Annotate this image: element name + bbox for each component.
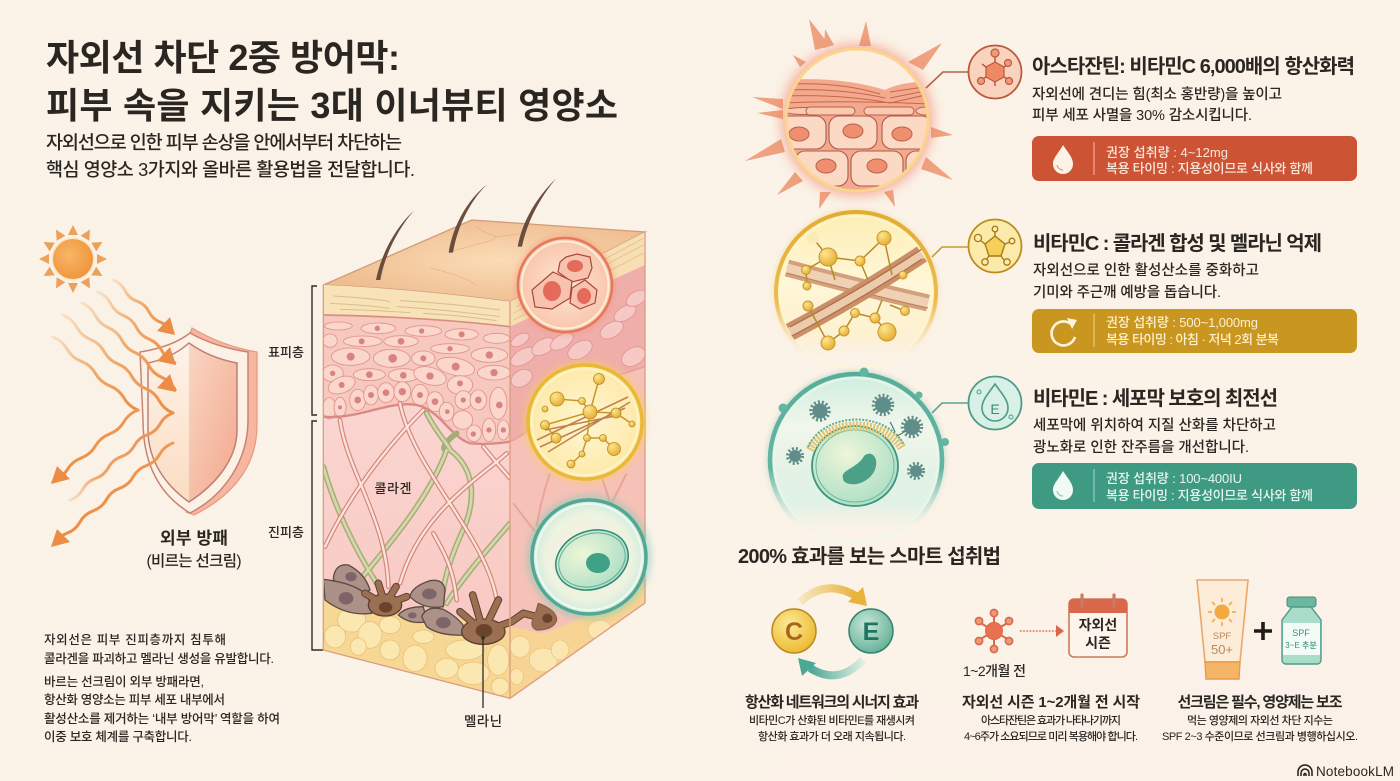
callout: dosage: 복용 타이밍 : 지용성이므로 식사와 함께 [1106,488,1313,503]
illustration: sunburned skin circle [745,19,968,209]
icon: calendar: 시즌 [1085,635,1111,651]
body [1033,417,1276,456]
icon: vitamin E drop: E [990,401,1000,417]
collagen fibres [323,403,510,603]
melanocyte dendritic cells [365,583,557,644]
body: 자외선에 견디는 힘(최소 홍반량)을 높이고 [1032,86,1282,103]
caption: 아스타잔틴은 효과가 나타나기까지 [981,714,1121,727]
icon: sun [39,225,107,293]
icon: vitamin E coin [849,609,893,653]
title [46,37,618,126]
callout: dosage [1032,463,1357,509]
brackets and layer labels: 진피층 [268,525,304,540]
icon: vitamin E coin: E [863,618,879,646]
caption [1162,694,1358,743]
label: external defense: (비르는 선크림) [146,552,242,570]
caption: 항산화 네트워크의 시너지 효과 [745,694,919,711]
caption: 비타민C가 산화된 비타민E를 재생시켜 [749,714,915,727]
icon: supplement bottle: SPF [1292,628,1310,638]
label: melanin with leader: 멜라닌 [464,714,502,729]
text block: explanation: 항산화 영양소는 피부 세포 내부에서 [44,693,225,707]
caption [962,694,1140,743]
icon: sunscreen tube: 50+ [1211,642,1233,657]
label: 1~2개월 전 [963,663,1026,679]
icon: vitamin C molecule [968,220,1022,272]
label: external defense: 외부 방패 [160,529,228,548]
caption: 항산화 효과가 더 오래 지속됩니다. [758,730,906,743]
stratum corneum [323,285,510,327]
text block: explanation: 활성산소를 제거하는 ‘내부 방어막’ 역할을 하여 [44,711,280,726]
callout: dosage: 권장 섭취량 : 500~1,000mg [1106,315,1258,330]
hair [376,179,556,280]
callout: dosage [1032,309,1357,353]
text block: explanation: 자외선은 피부 진피층까지 침투해 [44,633,226,647]
panel: vitamin C [774,210,1357,374]
epidermis [323,313,510,444]
body: 기미와 주근깨 예방을 돕습니다. [1033,284,1221,301]
subtitle [46,132,415,180]
inset: green cell on block [526,494,652,620]
callout: dosage: 복용 타이밍 : 지용성이므로 식사와 함께 [1106,161,1313,176]
keratinocyte grey cells [323,565,468,635]
chart: skin cross-section block [322,179,650,700]
panel: astaxanthin [745,19,1357,209]
text block: explanation [44,633,280,744]
heading: 비타민E : 세포막 보호의 최전선 [1033,387,1278,410]
caption: 선크림은 필수, 영양제는 보조 [1178,694,1343,711]
brackets and layer labels: 표피층 [268,345,304,360]
panel: vitamin E [767,368,1357,549]
caption: 먹는 영양제의 자외선 차단 지수는 [1187,714,1333,727]
heading: smart intake: 200% 효과를 보는 스마트 섭취법 [738,545,1001,568]
caption: 자외선 시즌 1~2개월 전 시작 [962,694,1140,711]
caption: SPF 2~3 수준이므로 선크림과 병행하십시오. [1162,730,1358,743]
illustration: cell membrane and free radicals [767,368,968,549]
arrow: E to C [798,658,863,676]
logo: NotebookLM: NotebookLM [1316,764,1394,779]
label: external defense [146,529,242,570]
subtitle: 자외선으로 인한 피부 손상을 안에서부터 차단하는 [46,132,402,153]
icon: molecule [975,609,1013,653]
text block: explanation: 바르는 선크림이 외부 방패라면, [44,675,204,689]
illustration: collagen and vitamin C molecules [774,210,968,374]
body: 광노화로 인한 잔주름을 개선합니다. [1033,439,1249,456]
icon: sunscreen tube: SPF [1213,631,1231,642]
title: 자외선 차단 2중 방어막: [46,37,400,78]
inset: yellow antioxidant molecules on block [523,360,647,484]
title: 피부 속을 지키는 3대 이너뷰티 영양소 [46,85,618,126]
arrow: incoming and deflected UV rays [51,280,176,547]
inset: red skin cells on block [515,235,615,335]
icon: calendar: 자외선 [1079,617,1117,633]
body: 피부 세포 사멸을 30% 감소시킵니다. [1032,107,1252,124]
body: 세포막에 위치하여 지질 산화를 차단하고 [1033,417,1276,434]
heading: 비타민C : 콜라겐 합성 및 멜라닌 억제 [1033,232,1322,255]
arrow: C to E [800,587,867,606]
arrow: dotted [1020,625,1064,637]
icon: vitamin C coin [772,609,816,653]
panel: timing [962,595,1140,743]
front face layers [322,283,511,700]
icon: vitamin E drop [968,376,1022,430]
icon: calendar [1069,595,1127,657]
top skin surface [323,220,645,302]
fat layer [323,600,510,700]
callout: dosage: 권장 섭취량 : 4~12mg [1106,145,1228,160]
icon: plus [1254,622,1272,640]
body [1032,86,1282,124]
body: 자외선으로 인한 활성산소를 중화하고 [1033,262,1259,279]
brackets and layer labels [268,286,323,650]
callout: dosage: 복용 타이밍 : 아침 · 저녁 2회 분복 [1106,332,1279,347]
icon: supplement bottle: 3~E 추분 [1285,641,1317,650]
caption: 4~6주가 소요되므로 미리 복용해야 합니다. [964,729,1138,743]
panel: synergy [745,587,919,743]
callout: dosage: 권장 섭취량 : 100~400IU [1106,471,1242,486]
icon: shield [140,328,257,515]
panel: external defense shield and sun [39,225,257,570]
caption [745,694,919,743]
icon: supplement bottle [1282,597,1321,664]
subtitle: 핵심 영양소 3가지와 올바른 활용법을 전달합니다. [46,159,415,180]
panel: sunscreen and supplements [1162,580,1358,743]
text block: explanation: 이중 보호 체계를 구축합니다. [44,729,192,744]
block outline [323,232,645,698]
body [1033,262,1259,301]
label: melanin with leader [464,636,502,729]
icon: astaxanthin molecule [968,46,1022,98]
icon: sunscreen tube [1197,580,1248,679]
right side face [508,230,650,700]
icon: vitamin C coin: C [785,618,803,646]
heading: 아스타잔틴: 비타민C 6,000배의 항산화력 [1032,55,1355,78]
callout: dosage [1032,136,1357,181]
text block: explanation: 콜라겐을 파괴하고 멜라닌 생성을 유발합니다. [44,651,274,666]
label: collagen: 콜라겐 [374,481,412,496]
